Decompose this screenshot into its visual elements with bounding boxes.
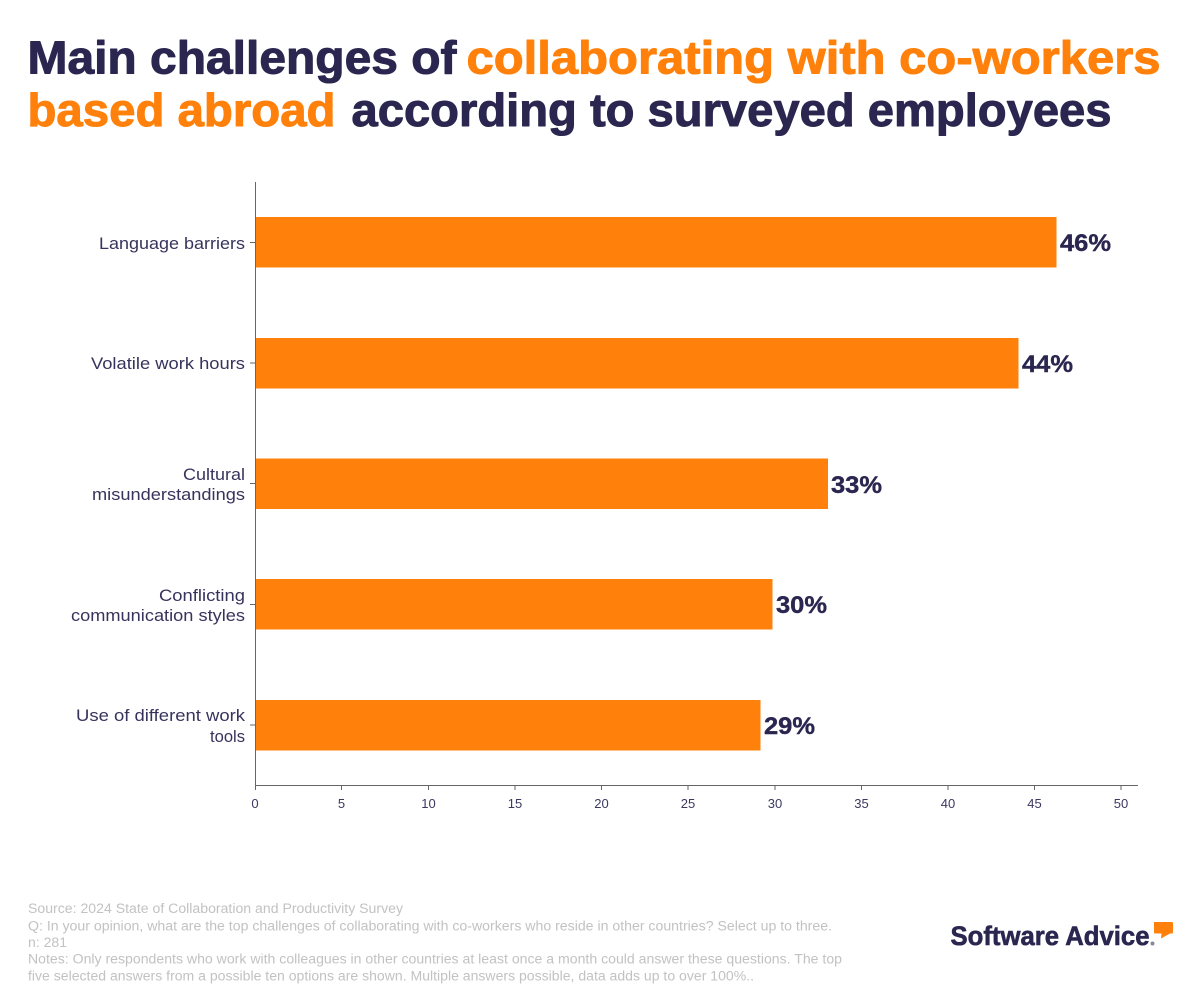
bar chart [71,182,1138,811]
axes [250,182,1138,790]
logo: Software Advice: Software Advice [950,921,1150,951]
category labels: tools [210,728,245,746]
x axis labels: 15 [508,796,522,811]
source and notes: Notes: Only respondents who work with colleagues in other countries at least once a month could answer these questions. The top [28,952,842,966]
value labels [764,230,1111,740]
title: collaborating with co-workers [466,32,1160,84]
bars [255,217,1056,750]
category labels [71,235,246,746]
icon: speech bubble [1154,922,1173,938]
value labels: 33% [831,472,882,499]
x axis labels: 10 [421,796,436,811]
category labels: Language barriers [99,235,245,253]
x axis labels: 50 [1114,796,1128,811]
title: based abroad [28,84,336,136]
x axis labels: 40 [941,796,955,811]
category labels: Use of different work [76,707,246,725]
value labels: 30% [776,592,827,619]
source and notes: n: 281 [28,935,67,950]
category labels: Cultural [183,466,245,484]
source and notes: Source: 2024 State of Collaboration and Productivity Survey [28,901,403,916]
category labels: Volatile work hours [91,355,245,373]
x axis labels: 20 [594,796,609,811]
title: Main challenges of [28,32,457,84]
x axis labels: 0 [251,796,259,811]
x axis labels: 5 [338,796,345,811]
category labels: Conflicting [159,587,245,605]
title [28,32,1160,136]
source and notes [28,901,842,984]
icon: registered mark [1150,942,1154,946]
title: according to surveyed employees [352,84,1112,136]
value labels: 46% [1060,230,1111,257]
value labels: 44% [1022,351,1073,378]
x axis labels: 45 [1027,796,1042,811]
category labels: communication styles [71,607,245,625]
source and notes: five selected answers from a possible ten options are shown. Multiple answers possible, data adds up to over 100%.. [28,968,754,984]
value labels: 29% [764,713,815,740]
x axis labels: 25 [681,796,695,811]
x axis labels: 35 [854,796,869,811]
x axis labels: 30 [768,796,782,811]
source and notes: Q: In your opinion, what are the top challenges of collaborating with co-workers who reside in other countries? Select up to three. [28,918,832,934]
category labels: misunderstandings [92,486,245,504]
x axis labels [251,796,1128,811]
